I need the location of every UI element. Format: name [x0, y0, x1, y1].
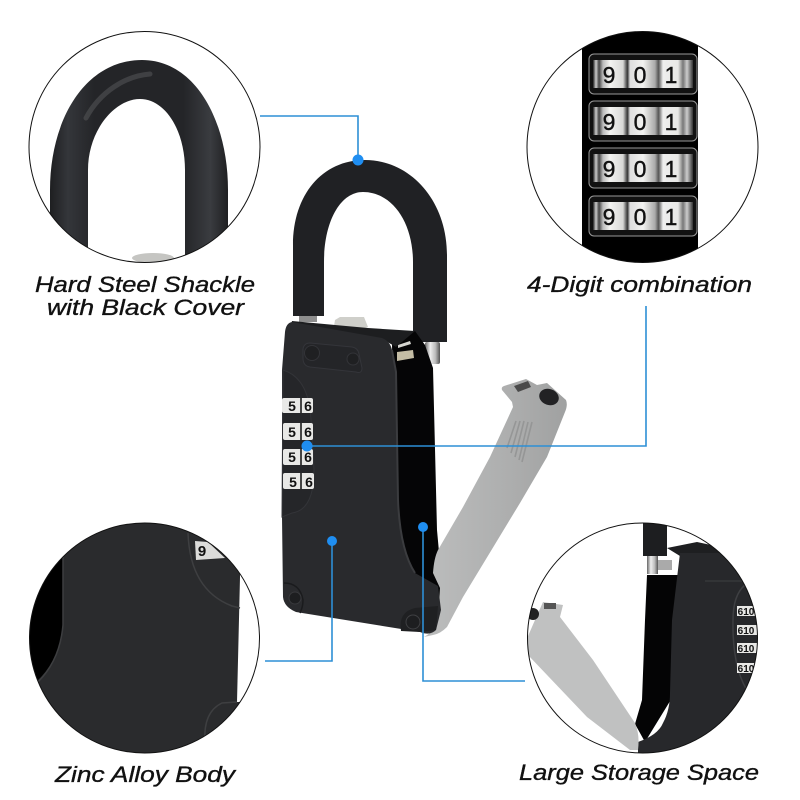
zoomed body [638, 553, 757, 752]
body screw plate [303, 343, 362, 372]
dial row 1: 0 [634, 62, 646, 88]
dial row 4: 0 [634, 204, 646, 230]
shackle pin [425, 342, 440, 364]
label: shackle line 1: Hard Steel Shackle [35, 272, 255, 297]
dial row 4 [589, 196, 697, 236]
body top screw right [347, 353, 359, 365]
bottom screw right [406, 615, 420, 629]
zoomed cover latch hole [530, 608, 539, 620]
zoomed body top [667, 542, 720, 556]
dial row 1 [589, 54, 697, 94]
zoomed dial wheel [195, 541, 225, 560]
dial wheels row: 6 [305, 474, 313, 490]
dial recess [282, 370, 314, 517]
zoomed shackle highlight [86, 74, 150, 118]
panel: storage detail [527, 522, 758, 754]
label: storage: Large Storage Space [519, 760, 759, 785]
zoomed latch [132, 253, 174, 262]
zoomed corner screw recess [204, 702, 237, 736]
zoomed white background [237, 574, 259, 702]
dial wheels row: 5 [288, 424, 296, 440]
lock shackle [293, 160, 447, 342]
dial wheels row: 5 [289, 474, 297, 490]
dial wheels row [282, 398, 314, 490]
label: body: Zinc Alloy Body [54, 762, 237, 787]
zoomed dial recess edge [732, 585, 746, 688]
dial row 2: 0 [634, 109, 646, 135]
zoomed body plate line [705, 580, 742, 582]
zoomed dial wheels: 610 [738, 664, 755, 675]
dial row 3: 0 [634, 156, 646, 182]
body top screw left [304, 346, 320, 360]
shackle left stub [299, 316, 317, 322]
bottom screw left [289, 592, 301, 604]
zoomed latch hinge [658, 560, 672, 570]
zoomed dial wheels: 610 [738, 607, 755, 618]
dial wheels row: 6 [304, 424, 312, 440]
zoomed dial wheels: 610 [738, 626, 755, 637]
dial row 3: 9 [603, 156, 615, 182]
dial wheels row: 5 [288, 398, 296, 414]
dial row 2 [589, 101, 697, 141]
top latch [334, 317, 368, 331]
zoomed dial wheels [737, 606, 757, 675]
cover ribs [507, 421, 532, 462]
leader line: storage [418, 522, 525, 681]
dial wheels row: 6 [304, 398, 312, 414]
zoomed shackle leg [643, 520, 667, 556]
zoomed dial digit: 9 [198, 543, 206, 560]
zoomed cavity [30, 558, 62, 680]
cavity edge shading [392, 350, 415, 573]
panel: combination detail [527, 30, 758, 265]
leader line: body [265, 536, 337, 661]
zoomed shackle pin [647, 556, 658, 574]
dial row 3: 1 [665, 156, 677, 182]
dial row 1: 9 [603, 62, 615, 88]
zoomed cover tab hole [544, 603, 556, 609]
bottom corner recess right [401, 606, 438, 632]
zoomed dial recess edge [188, 533, 240, 608]
cover tab hole [514, 381, 531, 392]
lock top face [290, 321, 415, 347]
cover latch hole [537, 386, 561, 408]
lock body front [282, 322, 441, 634]
panel: shackle detail [29, 32, 260, 270]
storage cavity [392, 331, 441, 620]
zoomed grey cover [522, 602, 639, 750]
panel: body detail [25, 520, 270, 760]
bottom corner recess left [284, 583, 303, 613]
zoomed cavity [635, 575, 680, 742]
black faceplate [582, 30, 698, 265]
dial row 4: 1 [665, 204, 677, 230]
central lock product [282, 160, 567, 637]
label: shackle line 2: with Black Cover [47, 295, 246, 320]
label: combination: 4-Digit combination [527, 272, 752, 297]
open grey cover [424, 379, 567, 637]
dial row 3 [589, 148, 697, 188]
dial row 4: 9 [603, 204, 615, 230]
dial row 1: 1 [665, 62, 677, 88]
cavity hinge detail [397, 341, 414, 361]
zoomed body surface [38, 524, 240, 752]
zoomed cavity edge [38, 557, 63, 682]
zoomed shackle [50, 60, 228, 270]
dial wheels row: 5 [288, 449, 296, 465]
dial wheels row: 6 [304, 449, 312, 465]
leader line: shackle [260, 116, 364, 166]
zoomed dial wheels: 610 [738, 644, 755, 655]
dial row 2: 1 [665, 109, 677, 135]
dial row 2: 9 [603, 109, 615, 135]
leader line: combination [302, 306, 646, 452]
